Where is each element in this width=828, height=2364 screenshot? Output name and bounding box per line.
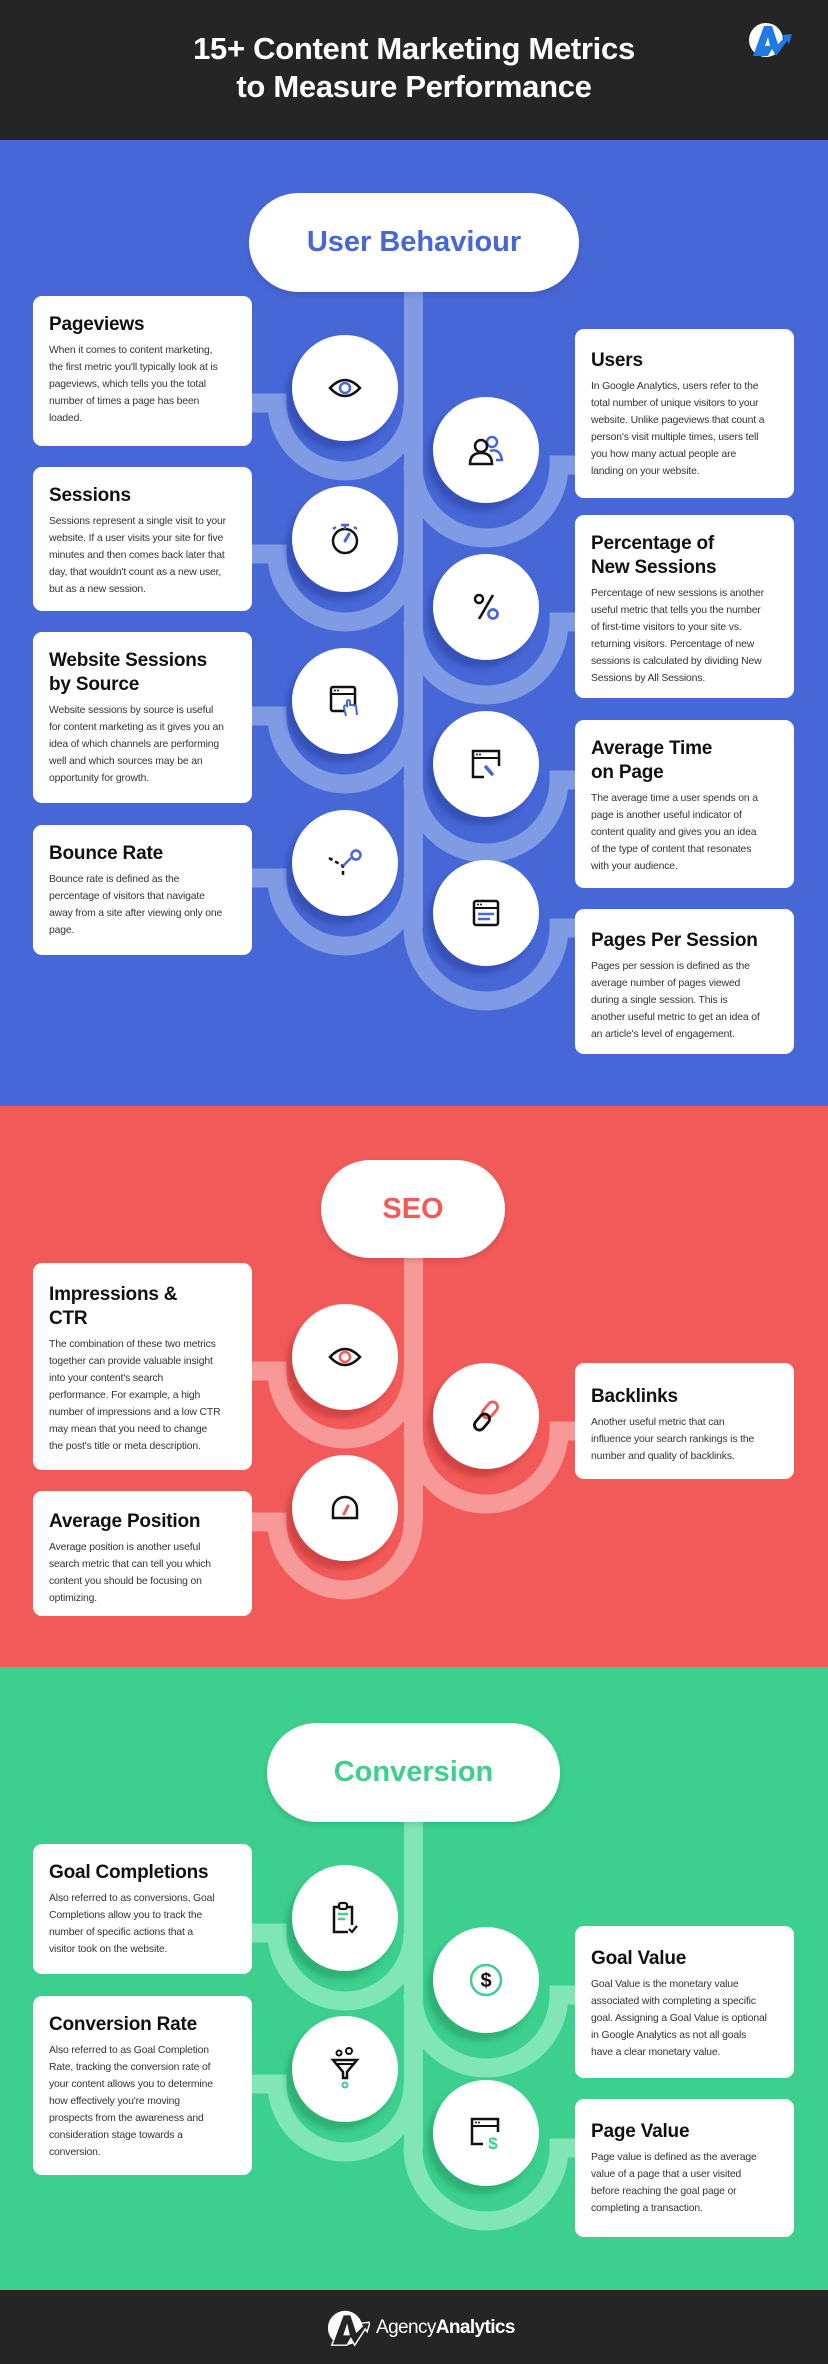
- panel: seo: [0, 1106, 828, 1667]
- card: Percentage of New Sessions: Sessions by All Sessions.: [591, 673, 705, 684]
- card: Goal Completions: Completions allow you to track the: [49, 1910, 202, 1921]
- card: Average Time on Page: of the type of content that resonates: [591, 844, 751, 855]
- icon: logo: [749, 23, 792, 57]
- card: Percentage of New Sessions: [575, 515, 794, 698]
- card: Average Position: Average Position: [49, 1511, 200, 1532]
- card: Users: In Google Analytics, users refer to the: [591, 381, 758, 392]
- card: Goal Value: associated with completing a specific: [591, 1996, 756, 2007]
- card: Page Value: completing a transaction.: [591, 2203, 703, 2214]
- card: Average Time on Page: [575, 720, 794, 888]
- card: Impressions & CTR: into your content's search: [49, 1373, 163, 1384]
- icon: stopwatch: [292, 486, 398, 592]
- card: Percentage of New Sessions: New Sessions: [591, 557, 716, 578]
- icon: funnel: [292, 2016, 398, 2122]
- heading: SEO: SEO: [382, 1192, 444, 1224]
- card: Backlinks: number and quality of backlinks.: [591, 1451, 735, 1462]
- card: Average Position: [33, 1491, 252, 1616]
- card: Goal Value: Goal Value: [591, 1948, 686, 1969]
- card: Sessions: minutes and then comes back later that: [49, 550, 225, 561]
- card: Conversion Rate: prospects from the awareness and: [49, 2113, 204, 2124]
- card: Conversion Rate: Rate, tracking the conversion rate of: [49, 2062, 210, 2073]
- card: Average Position: search metric that can tell you which: [49, 1559, 211, 1570]
- card: Conversion Rate: how effectively you're moving: [49, 2096, 180, 2107]
- card: Conversion Rate: Conversion Rate: [49, 2014, 197, 2035]
- card: Website Sessions by Source: opportunity for growth.: [49, 773, 149, 784]
- footer: [0, 2290, 828, 2364]
- card: Goal Value: goal. Assigning a Goal Value is optional: [591, 2013, 767, 2024]
- card: Backlinks: [575, 1363, 794, 1479]
- card: Pages Per Session: an article's level of engagement.: [591, 1029, 735, 1040]
- card: Users: Users: [591, 350, 643, 371]
- card: Percentage of New Sessions: Percentage of new sessions is another: [591, 588, 764, 599]
- card: Bounce Rate: away from a site after viewing only one: [49, 908, 222, 919]
- card: Average Position: Average position is another useful: [49, 1542, 200, 1553]
- card: Average Time on Page: The average time a user spends on a: [591, 793, 758, 804]
- card: Impressions & CTR: performance. For example, a high: [49, 1390, 200, 1401]
- card: Impressions & CTR: the post's title or meta description.: [49, 1441, 201, 1452]
- card: Goal Completions: [33, 1844, 252, 1974]
- card: Impressions & CTR: may mean that you need to change: [49, 1424, 207, 1435]
- card: Pageviews: loaded.: [49, 413, 82, 424]
- card: Pages Per Session: during a single session. This is: [591, 995, 728, 1006]
- icon: percent: [433, 554, 539, 660]
- heading: SEO: [321, 1160, 505, 1258]
- icon: eye: [292, 335, 398, 441]
- card: Page Value: before reaching the goal page or: [591, 2186, 736, 2197]
- card: Backlinks: Another useful metric that can: [591, 1417, 725, 1428]
- card: Conversion Rate: [33, 1996, 252, 2175]
- icon: browser dollar: [433, 2080, 539, 2186]
- icon: link: [433, 1363, 539, 1469]
- panel: user behaviour: [0, 140, 828, 1106]
- card: Page Value: Page value is defined as the average: [591, 2152, 757, 2163]
- title: [193, 31, 635, 104]
- card: Page Value: value of a page that a user visited: [591, 2169, 741, 2180]
- card: Conversion Rate: consideration stage towards a: [49, 2130, 183, 2141]
- heading: User Behaviour: User Behaviour: [307, 226, 521, 258]
- card: Website Sessions by Source: [33, 632, 252, 803]
- card: Website Sessions by Source: well and which sources may be an: [49, 756, 202, 767]
- icon: eye: [292, 1304, 398, 1410]
- card: Sessions: Sessions: [49, 485, 131, 506]
- card: Pages Per Session: Pages per session is defined as the: [591, 961, 750, 972]
- card: Website Sessions by Source: idea of which channels are performing: [49, 739, 219, 750]
- card: Goal Completions: Goal Completions: [49, 1862, 208, 1883]
- card: Impressions & CTR: [33, 1263, 252, 1470]
- card: Pageviews: the first metric you'll typically look at is: [49, 362, 218, 373]
- card: Goal Completions: number of specific actions that a: [49, 1927, 193, 1938]
- icon: clipboard: [292, 1865, 398, 1971]
- card: Average Time on Page: Average Time: [591, 738, 712, 759]
- card: Bounce Rate: percentage of visitors that navigate: [49, 891, 205, 902]
- card: Bounce Rate: Bounce rate is defined as the: [49, 874, 179, 885]
- header: [0, 0, 828, 140]
- card: Pageviews: When it comes to content marketing,: [49, 345, 212, 356]
- card: Users: person's visit multiple times, users tell: [591, 432, 758, 443]
- card: Users: landing on your website.: [591, 466, 699, 477]
- card: Bounce Rate: page.: [49, 925, 74, 936]
- footer logo: [328, 2310, 515, 2346]
- card: Pageviews: pageviews, which tells you the total: [49, 379, 206, 390]
- card: Backlinks: influence your search rankings is the: [591, 1434, 754, 1445]
- card: Page Value: [575, 2099, 794, 2237]
- card: Impressions & CTR: The combination of these two metrics: [49, 1339, 216, 1350]
- card: Conversion Rate: conversion.: [49, 2147, 100, 2158]
- heading: Conversion: [267, 1723, 560, 1822]
- card: Users: you how many actual people are: [591, 449, 736, 460]
- icon: gauge: [292, 1455, 398, 1561]
- heading: User Behaviour: [249, 193, 579, 292]
- card: Goal Completions: Also referred to as conversions, Goal: [49, 1893, 214, 1904]
- card: Percentage of New Sessions: Percentage of: [591, 533, 714, 554]
- card: Pages Per Session: [575, 909, 794, 1054]
- card: Sessions: Sessions represent a single visit to your: [49, 516, 226, 527]
- card: Average Time on Page: with your audience.: [591, 861, 678, 872]
- card: Average Time on Page: content quality and gives you an idea: [591, 827, 756, 838]
- card: Website Sessions by Source: for content marketing as it gives you an: [49, 722, 224, 733]
- card: Pageviews: [33, 296, 252, 446]
- card: Percentage of New Sessions: useful metric that tells you the number: [591, 605, 761, 616]
- card: Percentage of New Sessions: returning visitors. Percentage of new: [591, 639, 754, 650]
- card: Website Sessions by Source: by Source: [49, 674, 139, 695]
- icon: browser clock: [433, 711, 539, 817]
- card: Backlinks: Backlinks: [591, 1386, 678, 1407]
- card: Sessions: [33, 467, 252, 611]
- card: Impressions & CTR: CTR: [49, 1308, 87, 1329]
- icon: dollar coin: $: [480, 1970, 492, 1992]
- card: Percentage of New Sessions: sessions is calculated by dividing New: [591, 656, 761, 667]
- card: Conversion Rate: your content allows you to determine: [49, 2079, 213, 2090]
- card: Bounce Rate: Bounce Rate: [49, 843, 163, 864]
- card: Goal Value: have a clear monetary value.: [591, 2047, 720, 2058]
- icon: browser click: [292, 648, 398, 754]
- panel: conversion: [0, 1667, 828, 2290]
- card: Goal Value: in Google Analytics as not all goals: [591, 2030, 746, 2041]
- card: Average Position: content you should be focusing on: [49, 1576, 202, 1587]
- card: Impressions & CTR: number of impressions and a low CTR: [49, 1407, 220, 1418]
- card: Pages Per Session: Pages Per Session: [591, 930, 758, 951]
- card: Goal Completions: visitor took on the website.: [49, 1944, 167, 1955]
- card: Pageviews: number of times a page has been: [49, 396, 199, 407]
- card: Bounce Rate: [33, 825, 252, 955]
- card: Average Time on Page: on Page: [591, 762, 664, 783]
- card: Pages Per Session: average number of pages viewed: [591, 978, 740, 989]
- card: Users: website. Unlike pageviews that count a: [591, 415, 764, 426]
- title: to Measure Performance: [236, 69, 592, 104]
- card: Sessions: but as a new session.: [49, 584, 146, 595]
- icon: users: [433, 397, 539, 503]
- card: Conversion Rate: Also referred to as Goal Completion: [49, 2045, 209, 2056]
- card: Percentage of New Sessions: of first-time visitors to your site vs.: [591, 622, 742, 633]
- card: Website Sessions by Source: Website sessions by source is useful: [49, 705, 213, 716]
- card: Average Position: optimizing.: [49, 1593, 97, 1604]
- card: Goal Value: Goal Value is the monetary value: [591, 1979, 738, 1990]
- card: Pageviews: Pageviews: [49, 314, 144, 335]
- footer logo: AgencyAnalytics: [376, 2317, 515, 2338]
- title: 15+ Content Marketing Metrics: [193, 31, 635, 66]
- content layer: [33, 193, 794, 1054]
- icon: browser page: [433, 860, 539, 966]
- icon: bounce: [292, 810, 398, 916]
- card: Impressions & CTR: Impressions &: [49, 1284, 177, 1305]
- card: Sessions: day, that wouldn't count as a new user,: [49, 567, 221, 578]
- icon: dollar coin: [433, 1927, 539, 2033]
- card: Page Value: Page Value: [591, 2121, 689, 2142]
- heading: Conversion: Conversion: [334, 1756, 493, 1788]
- card: Users: [575, 329, 794, 498]
- card: Goal Value: [575, 1926, 794, 2078]
- card: Sessions: website. If a user visits your site for five: [49, 533, 223, 544]
- card: Users: total number of unique visitors to your: [591, 398, 758, 409]
- card: Pages Per Session: another useful metric to get an idea of: [591, 1012, 760, 1023]
- card: Website Sessions by Source: Website Sessions: [49, 650, 207, 671]
- card: Average Time on Page: page is another useful indicator of: [591, 810, 742, 821]
- card: Impressions & CTR: together can provide valuable insight: [49, 1356, 213, 1367]
